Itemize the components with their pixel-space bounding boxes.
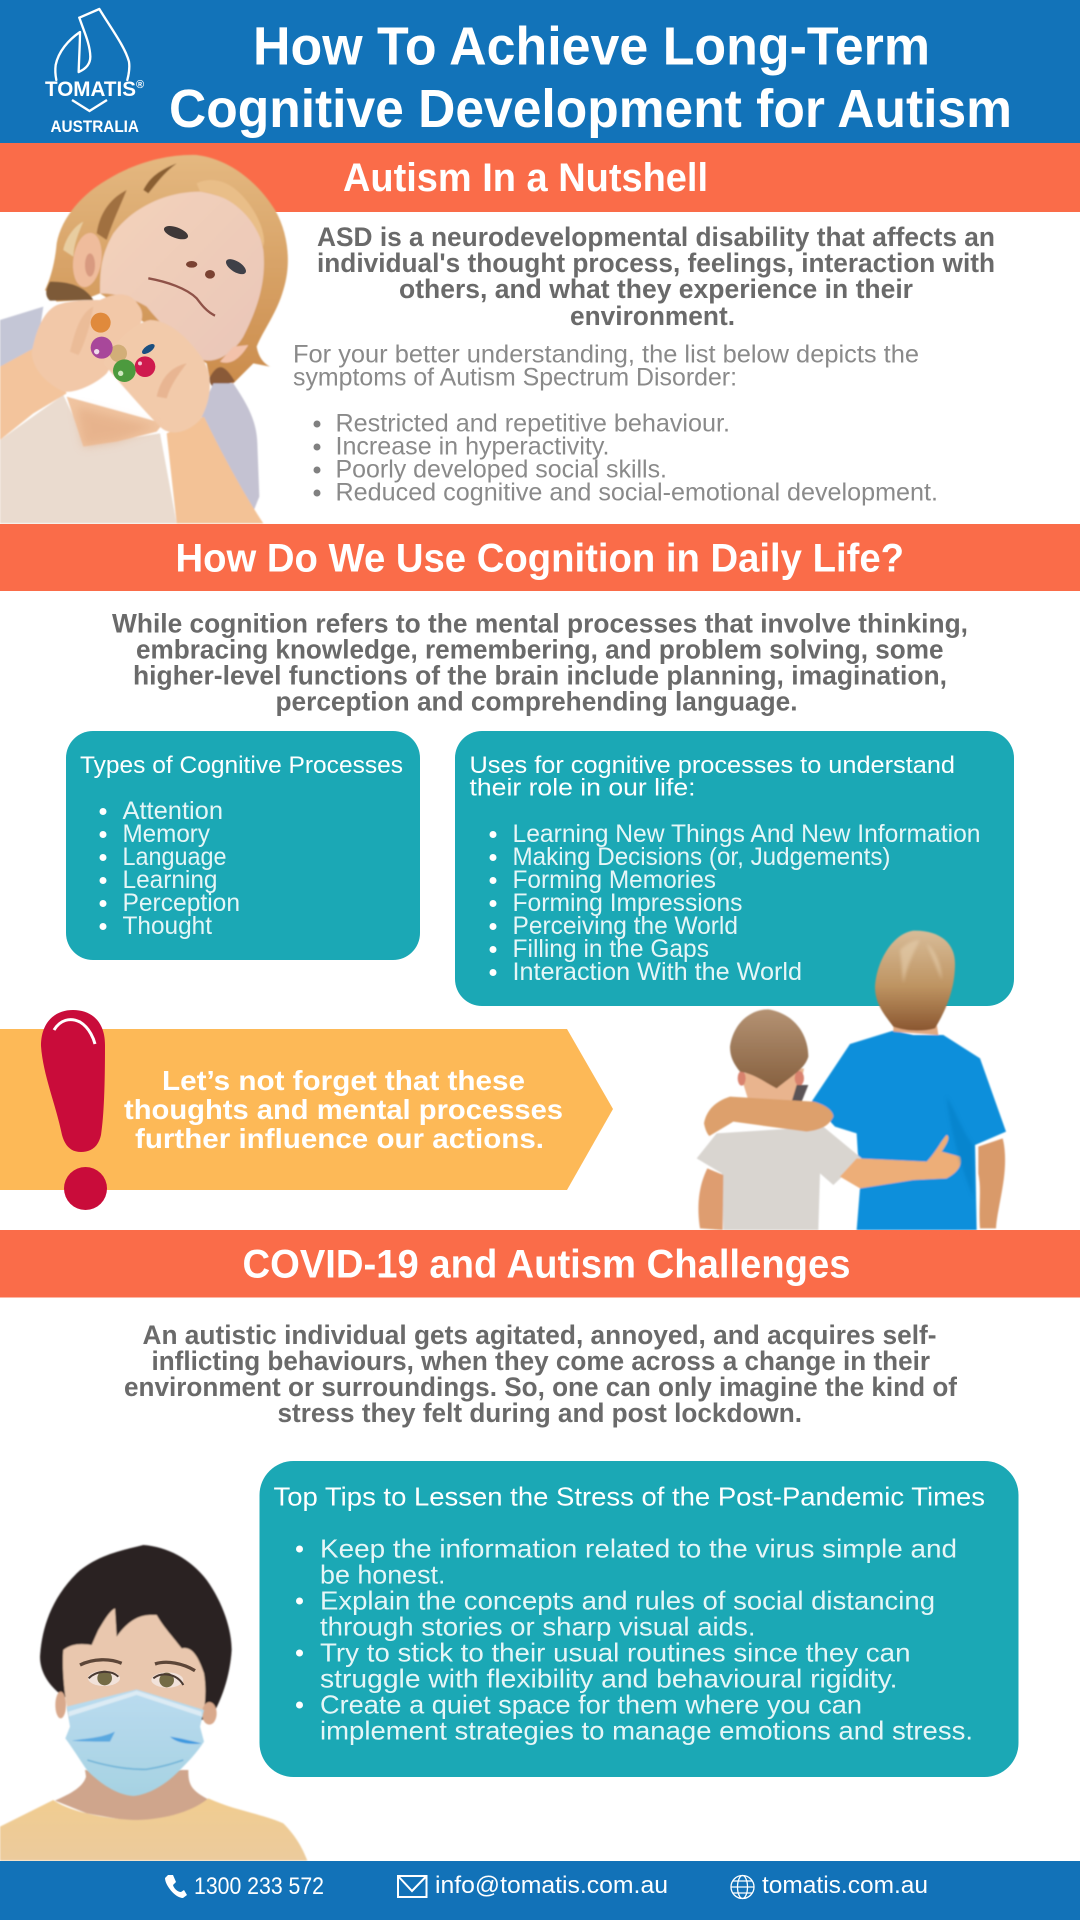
photo: child wearing a face mask <box>0 1545 307 1861</box>
logo flame icon <box>55 9 129 80</box>
cognition paragraph <box>112 609 968 717</box>
tips list: be honest. <box>320 1559 446 1589</box>
uses list: Forming Memories <box>512 866 716 894</box>
title: Cognitive Development for Autism <box>169 79 1012 139</box>
callout text: Let’s not forget that these <box>162 1065 525 1096</box>
eyes, nose and mouth <box>148 223 248 316</box>
uses list: Making Decisions (or, Judgements) <box>512 843 890 871</box>
panel: types of cognitive processes <box>66 731 420 960</box>
logo subtitle: AUSTRALIA <box>50 118 139 136</box>
symptoms lead-in text <box>293 340 919 392</box>
tips list: Keep the information related to the virus simple and <box>320 1533 957 1563</box>
process list: Language <box>122 843 226 871</box>
cognition paragraph: embracing knowledge, remembering, and problem solving, some <box>136 635 944 665</box>
phone number: 1300 233 572 <box>194 1873 324 1900</box>
process list: Thought <box>122 912 212 940</box>
symptoms list: Poorly developed social skills. <box>336 456 667 484</box>
tips list: implement strategies to manage emotions and stress. <box>320 1715 973 1745</box>
header band <box>0 0 1080 143</box>
uses list: Perceiving the World <box>512 912 738 940</box>
COVID paragraph: inflicting behaviours, when they come across a change in their <box>152 1346 930 1376</box>
section band: cognition <box>0 524 1080 591</box>
uses list: Interaction With the World <box>512 958 802 986</box>
icon: phone <box>165 1875 187 1898</box>
panel heading: Top Tips to Lessen the Stress of the Post-Pandemic Times <box>274 1482 985 1512</box>
title: How To Achieve Long-Term <box>253 16 930 76</box>
cognition paragraph: perception and comprehending language. <box>276 687 798 717</box>
heading: COVID-19 and Autism Challenges: COVID-19 and Autism Challenges <box>242 1242 850 1286</box>
surgical mask <box>65 1689 204 1796</box>
website address: tomatis.com.au <box>762 1872 928 1899</box>
tips list: Try to stick to their usual routines since they can <box>320 1637 910 1667</box>
COVID paragraph: environment or surroundings. So, one can only imagine the kind of <box>124 1372 958 1402</box>
tips list: through stories or sharp visual aids. <box>320 1611 756 1641</box>
process list: Perception <box>122 889 240 917</box>
symptoms list: Increase in hyperactivity. <box>336 432 610 460</box>
heading: How Do We Use Cognition in Daily Life?: How Do We Use Cognition in Daily Life? <box>176 536 904 580</box>
process list <box>100 797 240 940</box>
intro statement: others, and what they experience in their <box>399 274 913 304</box>
panel: uses for cognitive processes <box>455 731 1014 1006</box>
icon: envelope <box>398 1876 426 1897</box>
photo: child holding beads <box>0 155 288 523</box>
photo: two boys from behind <box>697 931 1006 1230</box>
clothing and hair shading <box>900 940 973 1197</box>
logo wordmark: TOMATIS <box>45 77 136 101</box>
logo: Tomatis Australia <box>45 9 144 136</box>
intro statement: individual's thought process, feelings, interaction with <box>317 248 995 278</box>
process list: Attention <box>122 797 223 825</box>
tips list <box>296 1533 973 1745</box>
uses list: Learning New Things And New Information <box>512 820 980 848</box>
callout text: thoughts and mental processes <box>124 1094 563 1125</box>
uses list: Filling in the Gaps <box>512 935 709 963</box>
registered mark: ® <box>136 79 144 91</box>
panel heading: Uses for cognitive processes to understand <box>470 752 955 779</box>
contact: website <box>731 1872 928 1899</box>
panel heading: Types of Cognitive Processes <box>80 752 403 779</box>
callout text <box>124 1065 563 1154</box>
COVID paragraph: stress they felt during and post lockdown. <box>278 1398 802 1428</box>
symptoms list <box>314 410 938 506</box>
symptoms lead-in text: For your better understanding, the list below depicts the <box>293 340 919 368</box>
cognition paragraph: While cognition refers to the mental processes that involve thinking, <box>112 609 968 639</box>
callout arrow <box>0 1029 613 1190</box>
intro statement <box>317 222 995 331</box>
email address: info@tomatis.com.au <box>435 1872 668 1899</box>
section band: Autism In a Nutshell <box>0 143 1080 212</box>
section band: COVID-19 <box>0 1230 1080 1298</box>
tips list: struggle with flexibility and behavioural rigidity. <box>320 1663 898 1693</box>
title <box>169 16 1012 139</box>
panel heading <box>470 752 955 802</box>
process list: Memory <box>122 820 210 848</box>
heading: Autism In a Nutshell: Autism In a Nutshell <box>343 156 708 200</box>
intro statement: ASD is a neurodevelopmental disability that affects an <box>317 222 995 252</box>
symptoms list: Restricted and repetitive behaviour. <box>336 410 730 438</box>
symptoms lead-in text: symptoms of Autism Spectrum Disorder: <box>293 364 737 392</box>
eyes and eyebrows <box>80 1660 195 1688</box>
panel: top tips <box>260 1461 1018 1777</box>
symptoms list: Reduced cognitive and social-emotional development. <box>336 478 938 506</box>
COVID paragraph <box>124 1320 958 1428</box>
footer band <box>0 1861 1080 1920</box>
uses list <box>490 820 980 986</box>
contact: email <box>398 1872 668 1899</box>
intro statement: environment. <box>570 301 735 331</box>
uses list: Forming Impressions <box>512 889 742 917</box>
icon: globe <box>731 1876 754 1898</box>
COVID paragraph: An autistic individual gets agitated, annoyed, and acquires self- <box>142 1320 936 1350</box>
panel heading: their role in our life: <box>470 775 696 802</box>
process list: Learning <box>122 866 218 894</box>
tips list: Explain the concepts and rules of social distancing <box>320 1585 935 1615</box>
callout text: further influence our actions. <box>135 1123 544 1154</box>
coloured beads <box>91 313 156 382</box>
cognition paragraph: higher-level functions of the brain include planning, imagination, <box>133 661 947 691</box>
neck shading <box>77 407 157 447</box>
tips list: Create a quiet space for them where you can <box>320 1689 862 1719</box>
icon: exclamation mark <box>41 1010 107 1210</box>
contact: phone <box>165 1873 324 1900</box>
logo chevron <box>72 100 107 111</box>
